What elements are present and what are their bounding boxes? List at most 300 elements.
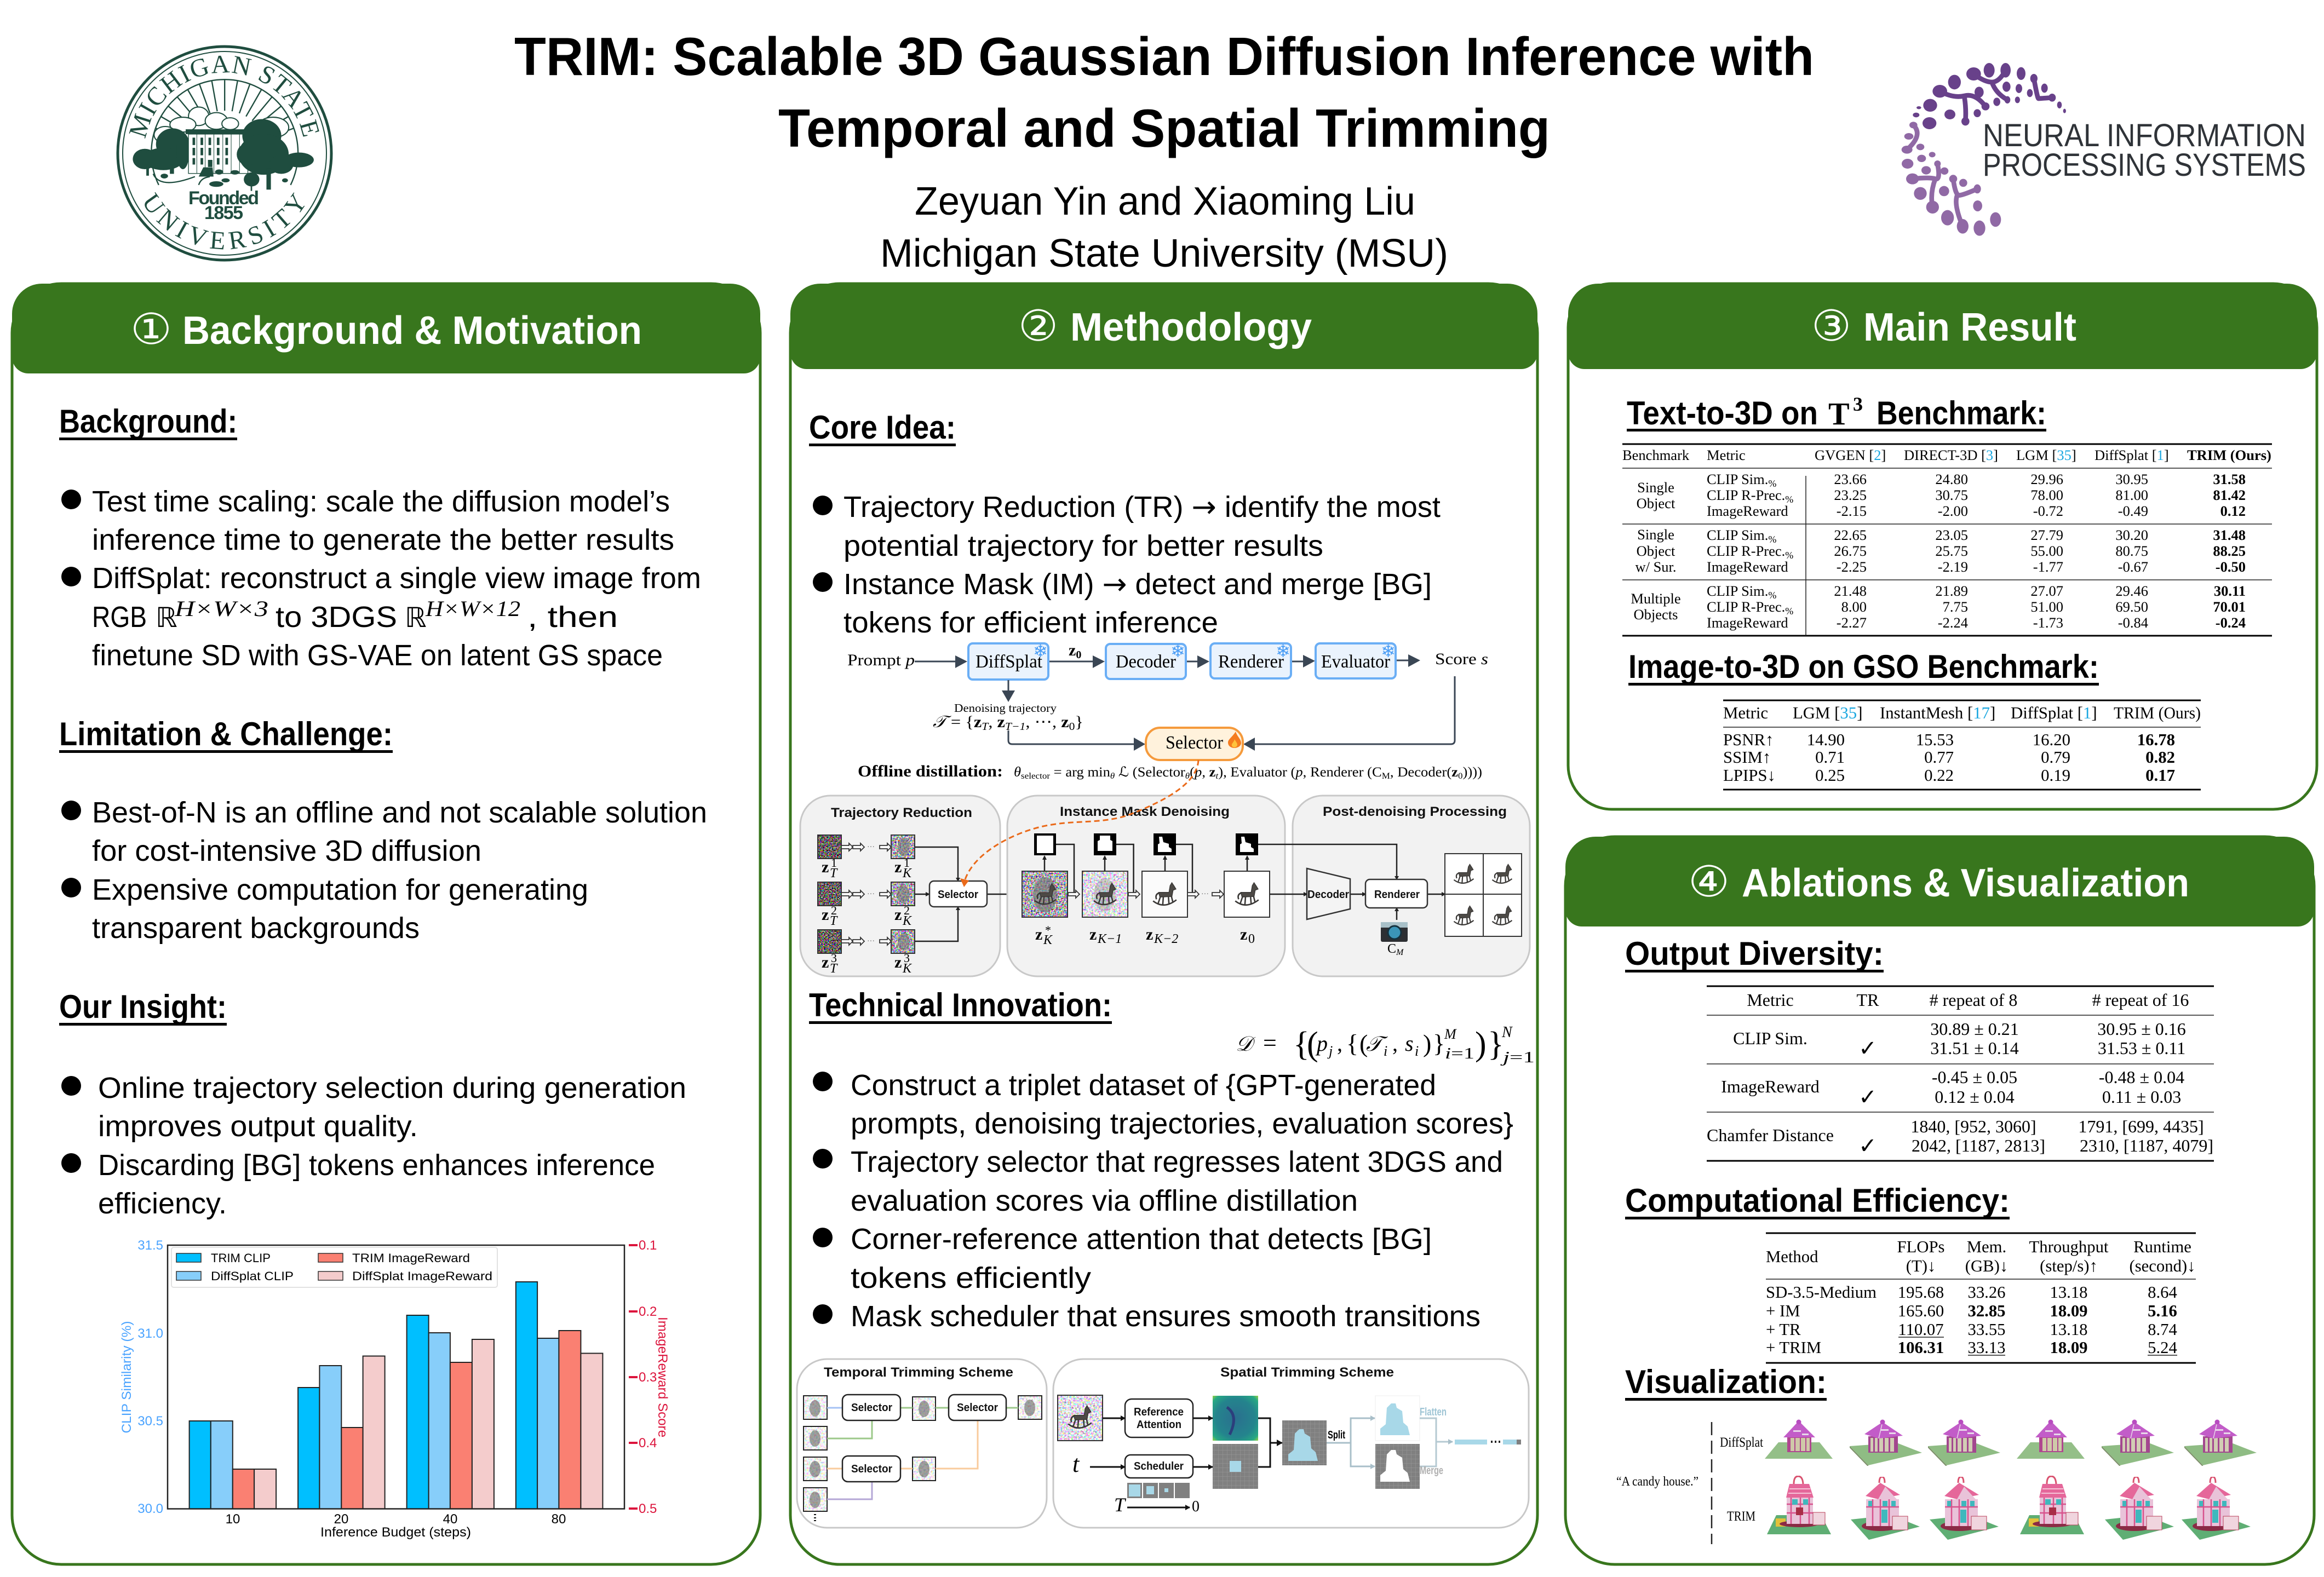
formula: triplet dataset: N bbox=[1501, 1024, 1513, 1041]
diagram: instance mask denoising panel: z bbox=[1146, 925, 1153, 943]
diagram: trajectory reduction panel: K bbox=[902, 914, 913, 928]
values: 0.82 bbox=[2145, 748, 2175, 767]
values: 23.25 bbox=[1834, 487, 1867, 503]
benchmark labels: Object bbox=[1637, 495, 1675, 511]
text block: technical innovation bullets bbox=[813, 1069, 1513, 1333]
panel header: methodology: ② bbox=[1018, 302, 1058, 351]
benchmark labels bbox=[1631, 479, 1681, 623]
heading: output diversity: Output Diversity: bbox=[1625, 935, 1884, 972]
panel header: background and motivation bbox=[12, 284, 760, 373]
values: -2.15 bbox=[1837, 503, 1867, 519]
panel header: main result bbox=[1568, 284, 2317, 369]
panel header: main result: Main Result bbox=[1863, 306, 2076, 349]
logo: NeurIPS bbox=[1902, 63, 2306, 236]
diagram: post-denoising processing panel: C bbox=[1387, 942, 1396, 956]
values: 23.66 bbox=[1834, 471, 1867, 487]
table header bbox=[1766, 1238, 2195, 1275]
diagram: trajectory reduction panel: 3 bbox=[904, 951, 910, 965]
diagram: spatial trimming scheme: 0 bbox=[1192, 1498, 1200, 1515]
diagram: trajectory reduction panel: K bbox=[902, 962, 913, 976]
text block: background bullets bbox=[61, 485, 701, 672]
panel: ablations and visualization bbox=[1565, 837, 2314, 1564]
panel: main result bbox=[1568, 284, 2317, 809]
values: 1840, [952, 3060] bbox=[1910, 1116, 2036, 1136]
left axis: 31.0 bbox=[137, 1326, 163, 1341]
logo: Michigan State University seal: UNIVERSITY bbox=[145, 192, 305, 250]
values: 30.95 ± 0.16 bbox=[2097, 1019, 2186, 1039]
diagram: temporal trimming scheme bbox=[797, 1359, 1047, 1528]
metric labels: % bbox=[1768, 478, 1776, 489]
diagram: temporal trimming scheme: Selector bbox=[851, 1402, 892, 1414]
heading: text-to-3D: Benchmark: bbox=[1877, 395, 2046, 431]
formula: offline distillation: , Decoder( bbox=[1390, 765, 1451, 780]
diagram: instance mask denoising panel bbox=[1007, 796, 1285, 976]
formula: triplet dataset: i=1 bbox=[1445, 1045, 1474, 1062]
diagram: offline distillation pipeline: T−1 bbox=[1005, 721, 1025, 733]
table header: Mem. bbox=[1967, 1238, 2006, 1256]
values: 0.79 bbox=[2041, 748, 2070, 767]
box: Evaluator: Evaluator bbox=[1321, 652, 1391, 672]
title: Temporal and Spatial Trimming bbox=[778, 98, 1550, 158]
metric labels: CLIP R-Prec. bbox=[1707, 543, 1785, 559]
diagram: offline distillation pipeline: } bbox=[1075, 713, 1083, 731]
formula: offline distillation: Offline distillation: bbox=[858, 762, 1003, 780]
icon: camera bbox=[1381, 922, 1408, 942]
text block: limitation bullets: Expensive computation for generating bbox=[92, 873, 588, 906]
values: ImageReward bbox=[1721, 1077, 1820, 1096]
heading: core idea: Core Idea: bbox=[809, 409, 956, 446]
text block: limitation bullets: Best-of-N is an offline and not scalable solution bbox=[92, 796, 707, 829]
left axis: 30.0 bbox=[137, 1501, 163, 1516]
box: DiffSplat: ❄ bbox=[1033, 641, 1048, 661]
values: 81.42 bbox=[2213, 487, 2246, 503]
values: + TR bbox=[1766, 1320, 1801, 1339]
benchmark labels: Objects bbox=[1634, 606, 1678, 623]
formula: triplet dataset: j=1 bbox=[1500, 1049, 1535, 1066]
metric labels: ImageReward bbox=[1707, 503, 1788, 519]
diagram: trajectory reduction panel: ··· bbox=[867, 937, 875, 946]
panel header: ablations and visualization: Ablations & Visualization bbox=[1742, 861, 2189, 905]
table header: Benchmark bbox=[1622, 447, 1690, 463]
text block: background bullets: , then bbox=[527, 601, 618, 634]
values: 21.48 bbox=[1834, 583, 1867, 599]
heading: text-to-3D: 3 bbox=[1853, 393, 1863, 415]
formula: triplet dataset: ( bbox=[1307, 1026, 1318, 1063]
values: 70.01 bbox=[2213, 598, 2246, 615]
diagram: offline distillation pipeline: z bbox=[997, 713, 1005, 731]
metric labels: ImageReward bbox=[1707, 614, 1788, 631]
formula: offline distillation: )))) bbox=[1463, 765, 1482, 780]
formula: offline distillation: ( bbox=[1190, 765, 1195, 780]
diagram: post-denoising processing panel: M bbox=[1396, 948, 1404, 957]
x axis: 80 bbox=[552, 1512, 566, 1527]
values: 2042, [1187, 2813] bbox=[1912, 1136, 2045, 1155]
text block: limitation bullets bbox=[61, 796, 707, 945]
values: 31.53 ± 0.11 bbox=[2098, 1038, 2185, 1058]
text block: background bullets: H×W×3 bbox=[174, 596, 268, 621]
diagram: trajectory reduction panel: 3 bbox=[831, 951, 837, 965]
diagram: trajectory reduction panel: T bbox=[830, 914, 838, 928]
formula: triplet dataset: = bbox=[1263, 1029, 1277, 1056]
table header: Runtime bbox=[2133, 1238, 2191, 1256]
metric labels: ImageReward bbox=[1707, 559, 1788, 575]
heading: text-to-3D: T bbox=[1828, 396, 1850, 431]
diagram: offline distillation pipeline bbox=[847, 641, 1488, 781]
formula: triplet dataset: i bbox=[1384, 1043, 1387, 1059]
diagram: post-denoising processing panel: Decoder bbox=[1307, 889, 1349, 901]
values: 33.26 bbox=[1967, 1283, 2006, 1302]
diagram: trajectory reduction panel: z bbox=[894, 858, 902, 876]
diagram: instance mask denoising panel: K−2 bbox=[1154, 932, 1178, 946]
heading: background: Background: bbox=[59, 403, 237, 440]
values: 7.75 bbox=[1943, 598, 1968, 615]
table header: # repeat of 8 bbox=[1930, 990, 2017, 1010]
table header: Metric bbox=[1707, 447, 1746, 463]
benchmark labels: Object bbox=[1637, 543, 1675, 559]
x axis: 20 bbox=[334, 1512, 348, 1527]
x axis: 10 bbox=[226, 1512, 240, 1527]
values: 5.24 bbox=[2148, 1338, 2177, 1357]
values: 26.75 bbox=[1834, 543, 1867, 559]
diagram: trajectory reduction panel: 1 bbox=[831, 856, 837, 870]
diagram: trajectory reduction panel: T bbox=[830, 962, 838, 976]
formula: offline distillation: θ bbox=[1185, 772, 1190, 781]
values: 31.48 bbox=[2213, 527, 2246, 543]
values: 30.95 bbox=[2115, 471, 2148, 487]
values: 18.09 bbox=[2050, 1338, 2088, 1357]
table header bbox=[1723, 704, 2201, 722]
values: -2.19 bbox=[1938, 559, 1968, 575]
text block: technical innovation bullets: Construct a triplet dataset of {GPT-generated bbox=[851, 1069, 1436, 1102]
values: 31.51 ± 0.14 bbox=[1930, 1038, 2019, 1058]
table header: Method bbox=[1766, 1247, 1818, 1266]
bar chart: CLIP similarity and ImageReward vs inference budget bbox=[119, 1238, 670, 1540]
formula: triplet dataset: { bbox=[1346, 1029, 1358, 1057]
table header: TRIM (Ours) bbox=[2114, 704, 2201, 722]
diagram: instance mask denoising panel: z bbox=[1089, 925, 1097, 943]
formula: offline distillation: t bbox=[1215, 772, 1219, 781]
legend: TRIM CLIP bbox=[211, 1251, 271, 1265]
values: SSIM↑ bbox=[1723, 748, 1771, 767]
metric labels bbox=[1707, 471, 1793, 631]
diagram: trajectory reduction panel: z bbox=[822, 953, 829, 971]
values: + TRIM bbox=[1766, 1338, 1821, 1357]
values: 2310, [1187, 4079] bbox=[2080, 1136, 2213, 1155]
panel header: main result: ③ bbox=[1811, 302, 1851, 351]
values: 51.00 bbox=[2030, 598, 2063, 615]
diagram: spatial trimming scheme: Spatial Trimming Scheme bbox=[1220, 1365, 1394, 1380]
table header: DiffSplat [1] bbox=[2011, 704, 2097, 722]
formula: offline distillation bbox=[858, 762, 1482, 781]
diagram: trajectory reduction panel: T bbox=[830, 866, 838, 880]
diagram: trajectory reduction panel: K bbox=[902, 866, 913, 880]
diagram: instance mask denoising panel: ··· bbox=[1201, 890, 1209, 899]
diagram: spatial trimming scheme: Attention bbox=[1137, 1419, 1181, 1431]
diagram: trajectory reduction panel: 2 bbox=[831, 903, 837, 917]
table header: TR bbox=[1857, 990, 1879, 1010]
table header: (T)↓ bbox=[1906, 1257, 1936, 1275]
formula: triplet dataset: ) bbox=[1423, 1029, 1431, 1057]
diagram: temporal trimming scheme: Selector bbox=[851, 1463, 892, 1475]
table header bbox=[1622, 447, 2271, 463]
diagram: post-denoising processing panel bbox=[1258, 796, 1530, 976]
formula: triplet dataset: 𝒟 bbox=[1236, 1033, 1256, 1056]
values: PSNR↑ bbox=[1723, 730, 1774, 749]
metric labels: % bbox=[1768, 590, 1776, 601]
diagram: instance mask denoising panel: Instance Mask Denoising bbox=[1060, 804, 1230, 819]
heading: image-to-3D: Image-to-3D on GSO Benchmark: bbox=[1628, 648, 2099, 685]
values: CLIP Sim. bbox=[1733, 1028, 1807, 1048]
panel header: background and motivation: ① bbox=[130, 305, 172, 354]
table header: GVGEN [2] bbox=[1815, 447, 1886, 463]
values: 27.07 bbox=[2030, 583, 2063, 599]
table header: DIRECT-3D [3] bbox=[1904, 447, 1998, 463]
formula: offline distillation: z bbox=[1451, 765, 1458, 780]
formula: offline distillation: ℒ (Selector bbox=[1115, 765, 1186, 780]
values: 30.20 bbox=[2115, 527, 2148, 543]
formula: triplet dataset: } bbox=[1488, 1026, 1504, 1063]
text block: limitation bullets: for cost-intensive 3D diffusion bbox=[92, 834, 481, 867]
legend: DiffSplat ImageReward bbox=[352, 1269, 492, 1283]
values: 5.16 bbox=[2148, 1302, 2177, 1320]
right axis: 0.1 bbox=[639, 1238, 657, 1253]
text block: insight bullets bbox=[61, 1072, 686, 1220]
table header: DiffSplat [1] bbox=[2095, 447, 2169, 463]
diagram: trajectory reduction panel bbox=[800, 796, 1022, 976]
values: -0.72 bbox=[2033, 503, 2063, 519]
benchmark labels: Single bbox=[1637, 479, 1674, 496]
figure: candy house comparison: “A candy house.” bbox=[1616, 1475, 1698, 1489]
text block: background bullets: H×W×12 bbox=[425, 596, 520, 621]
table header: TRIM (Ours) bbox=[2187, 447, 2271, 463]
values: 14.90 bbox=[1807, 730, 1845, 749]
diagram: spatial trimming scheme: Split bbox=[1328, 1429, 1345, 1441]
right axis bbox=[629, 1238, 670, 1516]
x axis: 40 bbox=[443, 1512, 457, 1527]
values: Chamfer Distance bbox=[1707, 1125, 1834, 1145]
text block: core idea bullets bbox=[813, 490, 1441, 639]
text block: technical innovation bullets: tokens efficiently bbox=[851, 1262, 1091, 1294]
box: Evaluator bbox=[1316, 641, 1396, 678]
figure: candy house comparison: DiffSplat bbox=[1720, 1435, 1763, 1450]
panel header: ablations and visualization: ④ bbox=[1688, 857, 1730, 907]
formula: triplet dataset: { bbox=[1293, 1026, 1310, 1063]
text block: core idea bullets: Instance Mask (IM) → detect and merge [BG] bbox=[843, 567, 1432, 601]
heading: visualization: Visualization: bbox=[1625, 1363, 1827, 1400]
values: 110.07 bbox=[1898, 1320, 1944, 1339]
table header: Throughput bbox=[2029, 1238, 2109, 1256]
values: 1791, [699, 4435] bbox=[2078, 1116, 2204, 1136]
legend bbox=[171, 1247, 497, 1287]
box: trainable Selector bbox=[1146, 728, 1243, 760]
right axis: 0.2 bbox=[639, 1304, 657, 1319]
values: -1.77 bbox=[2033, 559, 2063, 575]
values: 195.68 bbox=[1898, 1283, 1944, 1302]
table header: LGM [35] bbox=[2016, 447, 2076, 463]
text block: technical innovation bullets: Mask scheduler that ensures smooth transitions bbox=[851, 1300, 1481, 1333]
table: computational efficiency bbox=[1766, 1233, 2196, 1363]
table header: # repeat of 16 bbox=[2092, 990, 2189, 1010]
values: 8.74 bbox=[2148, 1320, 2177, 1339]
formula: offline distillation: p, Renderer (C bbox=[1295, 765, 1377, 780]
right axis: 0.4 bbox=[639, 1436, 657, 1451]
text block: background bullets: ℝ bbox=[156, 602, 177, 634]
values: 0.11 ± 0.03 bbox=[2102, 1087, 2181, 1107]
figure: candy house comparison bbox=[1616, 1419, 2257, 1544]
right axis: 0.3 bbox=[639, 1370, 657, 1385]
box: Renderer bbox=[1210, 641, 1291, 678]
text block: background bullets: to 3DGS bbox=[276, 601, 397, 634]
panel: background and motivation bbox=[12, 284, 760, 1564]
values: 88.25 bbox=[2213, 543, 2246, 559]
left axis: 30.5 bbox=[137, 1414, 163, 1429]
values: 13.18 bbox=[2050, 1283, 2088, 1302]
metric labels: % bbox=[1785, 494, 1793, 505]
heading: text-to-3D: Text-to-3D on bbox=[1627, 395, 1818, 431]
formula: offline distillation: M bbox=[1382, 772, 1390, 781]
values: 33.13 bbox=[1967, 1338, 2006, 1357]
diagram: spatial trimming scheme bbox=[1053, 1359, 1529, 1528]
left axis: CLIP Similarity (%) bbox=[119, 1321, 134, 1434]
values: 16.78 bbox=[2137, 730, 2175, 749]
values: 16.20 bbox=[2033, 730, 2070, 749]
diagram: spatial trimming scheme: Reference bbox=[1134, 1406, 1184, 1418]
metric labels: CLIP R-Prec. bbox=[1707, 487, 1785, 503]
diagram: temporal trimming scheme: Temporal Trimming Scheme bbox=[824, 1365, 1013, 1380]
diagram: offline distillation pipeline: z bbox=[1061, 713, 1069, 731]
table header: InstantMesh [17] bbox=[1880, 704, 1995, 722]
values: -2.24 bbox=[1938, 614, 1968, 631]
figure: candy house comparison: TRIM bbox=[1727, 1509, 1755, 1524]
values: 25.75 bbox=[1935, 543, 1968, 559]
logo: Michigan State University seal: 1855 bbox=[204, 203, 243, 223]
formula: triplet dataset: , bbox=[1392, 1031, 1398, 1056]
values: SD-3.5-Medium bbox=[1766, 1283, 1877, 1302]
text block: insight bullets: Online trajectory selection during generation bbox=[98, 1072, 686, 1104]
metric labels: % bbox=[1785, 606, 1793, 617]
diagram: offline distillation pipeline: 0 bbox=[1069, 721, 1075, 733]
diagram: temporal trimming scheme: Selector bbox=[957, 1402, 998, 1414]
legend: DiffSplat CLIP bbox=[211, 1269, 294, 1283]
values: 32.85 bbox=[1967, 1302, 2006, 1320]
values: 0.22 bbox=[1924, 766, 1954, 785]
values: 0.25 bbox=[1815, 766, 1845, 785]
panel: methodology bbox=[790, 284, 1537, 1564]
diagram: instance mask denoising panel: z bbox=[1035, 925, 1042, 943]
values: 31.58 bbox=[2213, 471, 2246, 487]
values: -2.00 bbox=[1938, 503, 1968, 519]
heading: limitation and challenge: Limitation & Challenge: bbox=[59, 716, 393, 752]
table: image-to-3D results bbox=[1723, 700, 2201, 790]
text block: background bullets: Test time scaling: scale the diffusion model’s bbox=[92, 485, 670, 518]
arrow: selector to trajectory reduction (dashed) bbox=[960, 760, 1198, 887]
values: 30.89 ± 0.21 bbox=[1930, 1019, 2019, 1039]
values: ✓ bbox=[1858, 1036, 1877, 1061]
table header: Metric bbox=[1747, 990, 1794, 1010]
logo: Michigan State University seal: Founded bbox=[188, 188, 259, 209]
diagram: post-denoising processing panel: Renderer bbox=[1374, 889, 1420, 901]
table header: (step/s)↑ bbox=[2040, 1257, 2098, 1275]
values: 13.18 bbox=[2050, 1320, 2088, 1339]
right axis: ImageReward Score bbox=[655, 1317, 670, 1437]
text block: background bullets: ℝ bbox=[405, 602, 427, 634]
values: 22.65 bbox=[1834, 527, 1867, 543]
formula: triplet dataset: j bbox=[1327, 1043, 1333, 1059]
table header: LGM [35] bbox=[1793, 704, 1862, 722]
authors: Zeyuan Yin and Xiaoming Liu bbox=[915, 180, 1415, 223]
values: 55.00 bbox=[2030, 543, 2063, 559]
values: 29.46 bbox=[2115, 583, 2148, 599]
text block: core idea bullets: tokens for efficient inference bbox=[843, 606, 1218, 639]
heading: our insight: Our Insight: bbox=[59, 988, 227, 1025]
values: 8.64 bbox=[2148, 1283, 2177, 1302]
values: 0.17 bbox=[2145, 766, 2175, 785]
values: 0.12 ± 0.04 bbox=[1935, 1087, 2015, 1107]
diagram: trajectory reduction panel: z bbox=[894, 906, 902, 924]
table header: FLOPs bbox=[1897, 1238, 1944, 1256]
values bbox=[1834, 471, 2246, 631]
text block: core idea bullets: Trajectory Reduction (TR) → identify the most bbox=[843, 490, 1441, 524]
formula: offline distillation: θ bbox=[1014, 765, 1021, 780]
title bbox=[514, 26, 1814, 158]
text block: limitation bullets: transparent backgrounds bbox=[92, 912, 420, 945]
diagram: trajectory reduction panel: ··· bbox=[867, 890, 875, 899]
diagram: offline distillation pipeline: Prompt p bbox=[847, 651, 915, 669]
box: Decoder: ❄ bbox=[1170, 641, 1185, 661]
diagram: offline distillation pipeline: , ⋯, bbox=[1025, 713, 1061, 731]
text block: background bullets: DiffSplat: reconstruct a single view image from bbox=[92, 562, 701, 595]
values: 27.79 bbox=[2030, 527, 2063, 543]
values: 24.80 bbox=[1935, 471, 1968, 487]
metric labels: % bbox=[1768, 534, 1776, 545]
values bbox=[1766, 1283, 2177, 1357]
values: 29.96 bbox=[2030, 471, 2063, 487]
values: -2.27 bbox=[1837, 614, 1867, 631]
diagram: offline distillation pipeline: 𝒯 = {z bbox=[933, 713, 981, 731]
formula: triplet dataset: ( bbox=[1359, 1029, 1368, 1057]
table header: (GB)↓ bbox=[1965, 1257, 2008, 1275]
values: -0.50 bbox=[2216, 559, 2246, 575]
logo: Michigan State University seal: MICHIGAN STATE bbox=[129, 56, 319, 139]
text block: technical innovation bullets: evaluation scores via offline distillation bbox=[851, 1184, 1358, 1217]
metric labels: CLIP Sim. bbox=[1707, 527, 1768, 543]
values bbox=[1707, 1019, 2213, 1159]
diagram: offline distillation pipeline: T bbox=[982, 721, 989, 733]
DiffSplat renders bbox=[1765, 1419, 2257, 1467]
text block: technical innovation bullets: Trajectory selector that regresses latent 3DGS and bbox=[851, 1146, 1503, 1178]
metric labels: CLIP R-Prec. bbox=[1707, 598, 1785, 615]
values: -2.25 bbox=[1837, 559, 1867, 575]
left axis bbox=[119, 1238, 163, 1516]
heading: text-to-3D bbox=[1627, 393, 2046, 431]
diagram: instance mask denoising panel: 0 bbox=[1248, 932, 1255, 946]
diagram: trajectory reduction panel: z bbox=[894, 953, 902, 971]
formula: offline distillation: ), Evaluator ( bbox=[1218, 765, 1295, 780]
text block: insight bullets: efficiency. bbox=[98, 1187, 227, 1220]
diagram: offline distillation pipeline: , bbox=[988, 713, 997, 731]
logo: Michigan State University seal bbox=[116, 45, 333, 262]
box: DiffSplat: DiffSplat bbox=[975, 652, 1043, 672]
metric labels: CLIP Sim. bbox=[1707, 583, 1768, 599]
diagram: trajectory reduction panel: z bbox=[822, 906, 829, 924]
formula: triplet dataset: p bbox=[1315, 1031, 1328, 1056]
values: 78.00 bbox=[2030, 487, 2063, 503]
diagram: trajectory reduction panel: Selector bbox=[938, 889, 978, 901]
right axis: 0.5 bbox=[639, 1501, 657, 1516]
values: 8.00 bbox=[1841, 598, 1867, 615]
values: -0.45 ± 0.05 bbox=[1932, 1067, 2017, 1087]
values: 21.89 bbox=[1935, 583, 1968, 599]
